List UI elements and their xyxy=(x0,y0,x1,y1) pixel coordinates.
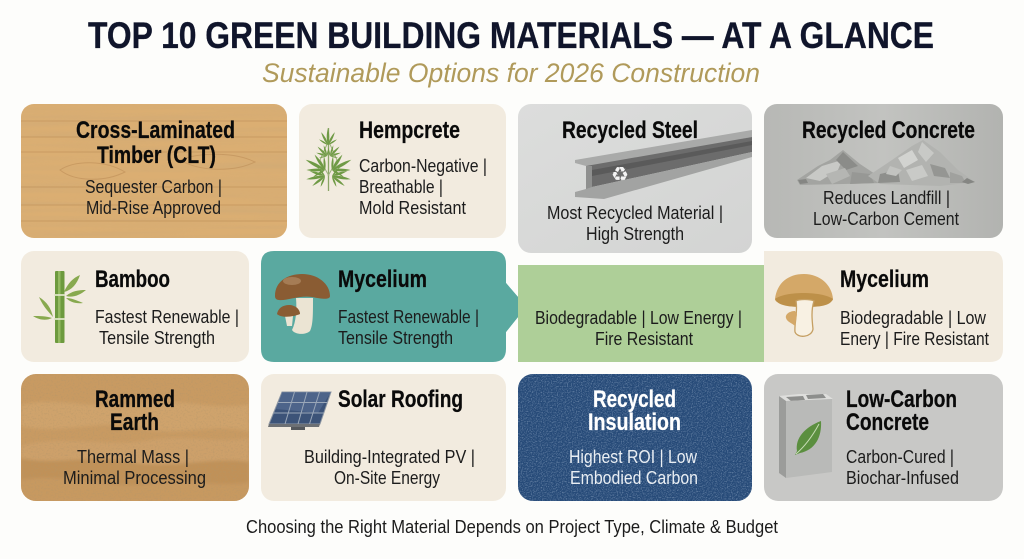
panel: low-carbon concrete xyxy=(764,374,1003,501)
panel: mycelium xyxy=(764,251,1003,362)
panel: recycled steel xyxy=(518,104,752,253)
panel: bamboo xyxy=(21,251,249,362)
heading xyxy=(846,386,957,436)
description: Low-Carbon Cement xyxy=(813,208,959,229)
panel: cross-laminated timber xyxy=(21,104,287,238)
footer note: Choosing the Right Material Depends on Project Type, Climate & Budget xyxy=(246,516,778,537)
icon: tan mushroom xyxy=(775,274,833,336)
panel: recycled concrete xyxy=(764,104,1003,238)
description: On-Site Energy xyxy=(334,467,441,488)
description: Mold Resistant xyxy=(359,197,466,218)
description xyxy=(338,306,479,348)
description xyxy=(535,307,742,349)
heading: Cross-Laminated xyxy=(76,117,235,144)
description: Most Recycled Material | xyxy=(547,202,723,223)
description xyxy=(569,446,698,488)
heading xyxy=(76,117,235,169)
description: Building-Integrated PV | xyxy=(304,446,475,467)
description xyxy=(63,446,206,488)
panel: rammed earth xyxy=(21,374,249,501)
heading: Rammed xyxy=(95,386,175,413)
heading xyxy=(588,386,681,436)
description: Carbon-Cured | xyxy=(846,446,954,467)
icon: brown mushrooms xyxy=(275,274,330,334)
description xyxy=(846,446,959,488)
description: High Strength xyxy=(586,223,684,244)
description xyxy=(359,155,487,218)
description: Fire Resistant xyxy=(595,328,693,349)
icon: rubble piles xyxy=(797,140,975,186)
heading: Recycled xyxy=(593,386,676,413)
panel: green properties band xyxy=(506,265,764,362)
description: Enery | Fire Resistant xyxy=(840,328,989,349)
subtitle: Sustainable Options for 2026 Construction xyxy=(262,58,760,88)
panel: solar roofing xyxy=(261,374,506,501)
heading: Insulation xyxy=(588,409,681,436)
heading xyxy=(95,386,175,436)
heading: Hempcrete xyxy=(359,117,460,144)
heading: Solar Roofing xyxy=(338,386,463,413)
panel: recycled insulation xyxy=(518,374,752,501)
description: Tensile Strength xyxy=(99,327,215,348)
description xyxy=(547,202,723,244)
description: Highest ROI | Low xyxy=(569,446,698,467)
description xyxy=(840,307,989,349)
heading: Recycled Steel xyxy=(562,117,698,144)
heading: Earth xyxy=(110,409,159,436)
description: Biodegradable | Low xyxy=(840,307,987,328)
description: Reduces Landfill | xyxy=(823,187,950,208)
description: Minimal Processing xyxy=(63,467,206,488)
heading: Mycelium xyxy=(840,266,929,293)
panel: hempcrete xyxy=(299,104,506,238)
description: Carbon-Negative | xyxy=(359,155,487,176)
description: Sequester Carbon | xyxy=(85,176,222,197)
description: Biochar-Infused xyxy=(846,467,959,488)
description xyxy=(95,306,239,348)
description: Tensile Strength xyxy=(338,327,453,348)
description: Thermal Mass | xyxy=(77,446,189,467)
icon: bamboo stalk xyxy=(33,271,86,343)
description: Mid-Rise Approved xyxy=(86,197,221,218)
description: Fastest Renewable | xyxy=(95,306,239,327)
panel: mycelium highlighted xyxy=(261,251,518,362)
description xyxy=(304,446,475,488)
icon: hemp plant xyxy=(300,128,357,191)
icon: solar panel xyxy=(268,392,331,430)
heading: Timber (CLT) xyxy=(97,142,216,169)
icon: recycling symbol: ♻ xyxy=(611,162,629,186)
description: Breathable | xyxy=(359,176,443,197)
heading: Mycelium xyxy=(338,266,427,293)
icon: steel I-beam xyxy=(575,130,752,199)
description: Embodied Carbon xyxy=(570,467,698,488)
description: Fastest Renewable | xyxy=(338,306,479,327)
heading: Concrete xyxy=(846,409,929,436)
heading: Bamboo xyxy=(95,266,170,293)
description xyxy=(85,176,222,218)
description: Biodegradable | Low Energy | xyxy=(535,307,742,328)
heading: Recycled Concrete xyxy=(802,117,975,144)
icon: concrete block with leaf xyxy=(779,394,833,478)
description xyxy=(813,187,959,229)
heading: Low-Carbon xyxy=(846,386,957,413)
